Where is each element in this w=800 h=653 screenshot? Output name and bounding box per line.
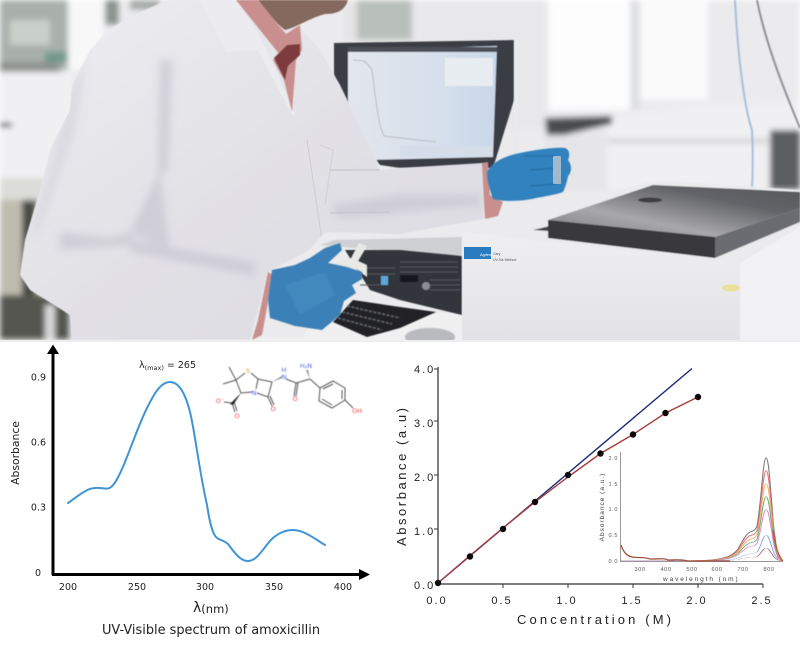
- inset y tick labels: 2.0: [609, 456, 618, 462]
- inset chart: absorbance spectra: [599, 452, 783, 583]
- inset x tick labels: [635, 567, 774, 573]
- inset x tick labels: 300: [635, 567, 645, 573]
- molecule atom labels: [216, 362, 362, 420]
- y tick labels: 0: [35, 568, 41, 579]
- axes: [434, 367, 763, 588]
- x tick labels: [59, 582, 352, 593]
- molecule wedge bonds: [230, 370, 310, 405]
- keyboard: [333, 300, 436, 337]
- right cuff and sleeve end: [482, 162, 503, 219]
- measured data line: [438, 397, 698, 583]
- x tick labels: 200: [59, 582, 77, 593]
- molecule atom labels: N: [252, 389, 257, 397]
- inset x tick labels: 400: [661, 567, 671, 573]
- y tick labels: 4.0: [414, 364, 435, 376]
- computer monitor: [334, 40, 518, 168]
- pink shirt collar: [236, 0, 302, 112]
- x tick labels: 250: [128, 582, 146, 593]
- molecule atom labels: O: [292, 395, 298, 403]
- y tick labels: 0.0: [414, 580, 435, 592]
- x tick labels: 0.5: [491, 595, 513, 607]
- lab coat: [20, 0, 487, 340]
- x tick labels: 0.0: [426, 595, 448, 607]
- x tick labels: 300: [196, 582, 214, 593]
- inset spectra curves: [621, 458, 783, 561]
- y axis arrow: [47, 344, 59, 575]
- inset x tick labels: 600: [712, 567, 722, 573]
- photo bottom edge: [0, 340, 800, 342]
- instrument logo badge: Cary: [493, 252, 501, 256]
- chart: absorbance vs concentration calibration: [394, 364, 783, 627]
- y tick labels: [414, 364, 435, 592]
- inset y tick labels: 0.5: [609, 533, 618, 539]
- inset y tick labels: 1.5: [609, 482, 618, 488]
- ideal linear fit line: [438, 368, 692, 583]
- coat collar and lapel: [200, 0, 296, 115]
- chart: UV-Visible spectrum of amoxicillin: [9, 344, 370, 638]
- silver monitor base plate: [320, 237, 462, 256]
- background wires: [735, 0, 800, 188]
- x axis arrow: [52, 569, 370, 580]
- molecule atom labels: H₂N: [300, 362, 312, 370]
- molecule atom labels: N: [282, 373, 287, 381]
- pipette: [333, 243, 367, 277]
- photo: scientist using UV-Vis spectrophotometer: [0, 0, 800, 346]
- lambda max label: λ: [139, 360, 145, 371]
- molecule atom labels: O: [270, 405, 276, 413]
- x axis title: (nm): [201, 602, 229, 616]
- x tick labels: 2.5: [751, 595, 773, 607]
- coat body: [20, 0, 487, 340]
- coat soft fold shading: [30, 60, 480, 276]
- x tick labels: 350: [265, 582, 283, 593]
- indicator light: [722, 284, 740, 292]
- photo background: blurred laboratory: [0, 0, 800, 341]
- molecule atom labels: H: [282, 366, 287, 374]
- left gloved hand: [268, 243, 362, 330]
- instrument logo badge: UV-Vis Method: [493, 258, 516, 262]
- inset x tick labels: 700: [738, 567, 748, 573]
- amoxicillin molecule: [216, 362, 362, 420]
- left cuff: [252, 272, 273, 340]
- instrument logo badge: [464, 247, 516, 262]
- lambda max label: (max): [145, 364, 164, 372]
- y axis title: Absorbance: [9, 421, 22, 485]
- molecule atom labels: OH: [352, 407, 362, 415]
- y tick labels: 0.9: [31, 372, 46, 384]
- inset x tick labels: 500: [687, 567, 697, 573]
- lambda max label: = 265: [164, 360, 196, 371]
- chart caption: UV-Visible spectrum of amoxicillin: [102, 623, 320, 638]
- inset y tick labels: 1.0: [609, 507, 618, 513]
- x tick labels: 2.0: [686, 595, 708, 607]
- cuvette: [553, 156, 561, 184]
- inset y tick labels: 0.0: [609, 559, 618, 565]
- neck: [258, 0, 348, 30]
- instrument logo badge: Agilent: [480, 252, 493, 257]
- y tick labels: 0.3: [31, 502, 46, 514]
- y tick labels: 2.0: [414, 472, 435, 484]
- x tick labels: 400: [334, 582, 352, 593]
- inset x tick labels: 800: [764, 567, 774, 573]
- absorbance curve: [68, 382, 325, 561]
- y tick labels: [31, 372, 46, 579]
- x tick labels: 1.5: [621, 595, 643, 607]
- inset y axis title: Absorbance (a.u.): [599, 473, 606, 541]
- molecule atom labels: O⁻: [216, 397, 224, 405]
- inset y tick labels: [609, 456, 618, 565]
- y axis title: Absorbance (a.u): [394, 408, 409, 546]
- y tick labels: 3.0: [414, 418, 435, 430]
- inset x axis title: wavelength (nm): [662, 576, 740, 583]
- desktop computer unit: [345, 250, 462, 315]
- molecule bonds: [223, 367, 353, 412]
- molecule atom labels: O: [234, 412, 240, 420]
- x tick labels: 1.0: [556, 595, 578, 607]
- molecule atom labels: S: [246, 367, 250, 375]
- x axis title: Concentration (M): [517, 612, 671, 627]
- inset axes: [620, 452, 783, 562]
- x axis title: λ: [193, 600, 201, 616]
- data points: [435, 394, 701, 586]
- right gloved hand: [487, 148, 571, 201]
- sample holder on table: [405, 328, 455, 346]
- x tick labels: [426, 595, 773, 607]
- instrument: UV-Vis spectrophotometer: [462, 181, 800, 341]
- work table: [300, 312, 462, 341]
- y tick labels: 1.0: [414, 526, 435, 538]
- y tick labels: 0.6: [31, 438, 46, 448]
- white lower panel: [0, 342, 800, 653]
